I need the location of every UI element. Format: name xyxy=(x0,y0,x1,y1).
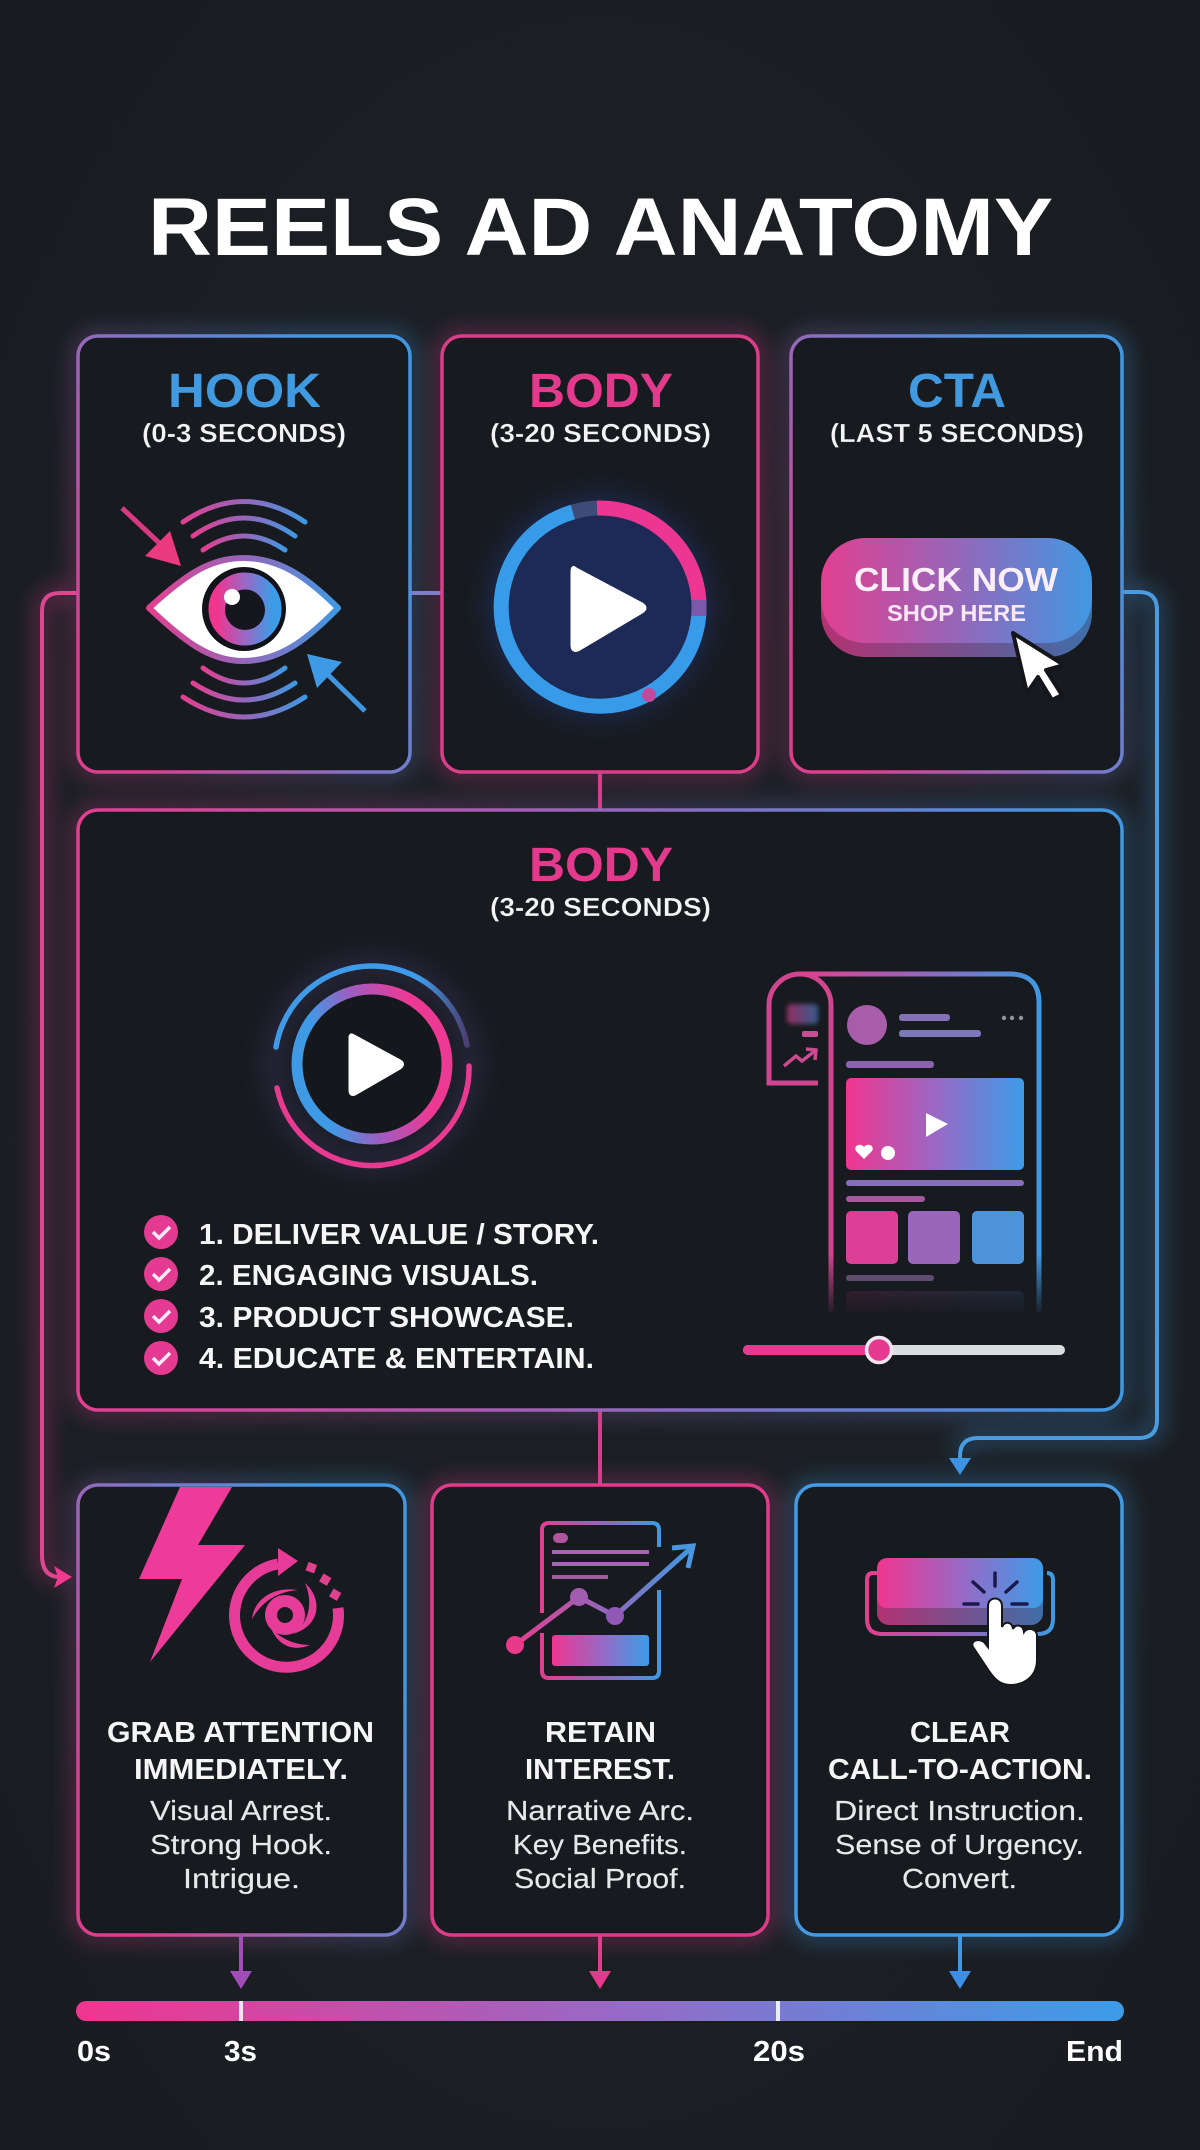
timeline label: 0s: 0s xyxy=(77,2036,111,2068)
arrow: retain interest to timeline xyxy=(589,1935,611,1989)
subheading: hook timing: (0-3 SECONDS) xyxy=(142,418,346,448)
heading: retain interest: RETAIN xyxy=(545,1717,656,1749)
connector: hook to body xyxy=(410,591,442,595)
text: clear call-to-action details: Direct Instruction. xyxy=(834,1795,1085,1826)
icon: lightning bolt xyxy=(139,1487,245,1662)
panel: hook xyxy=(78,336,410,772)
panel: clear call-to-action xyxy=(796,1485,1122,1935)
icon: click now button xyxy=(821,538,1092,700)
panel: body overview xyxy=(442,336,758,772)
icon: cursor xyxy=(1013,633,1064,700)
heading: hook: HOOK xyxy=(168,365,321,418)
timeline label: end: End xyxy=(1066,2036,1123,2068)
list item 4: 4. EDUCATE & ENTERTAIN. xyxy=(199,1343,594,1375)
timeline bar xyxy=(76,2001,1124,2068)
arrow: grab attention to timeline xyxy=(230,1935,252,1989)
text: grab attention details: Intrigue. xyxy=(183,1863,300,1894)
panel: grab attention xyxy=(78,1485,405,1935)
heading: grab attention xyxy=(107,1717,374,1786)
text: grab attention details: Strong Hook. xyxy=(150,1829,332,1860)
panel glow layer xyxy=(42,336,1157,1935)
subheading: cta timing: (LAST 5 SECONDS) xyxy=(830,418,1084,448)
connector: body to detail panel xyxy=(598,772,602,810)
text: retain interest details: Key Benefits. xyxy=(513,1829,687,1860)
icon: play progress ring xyxy=(488,495,712,719)
text: retain interest details: Social Proof. xyxy=(514,1863,686,1894)
icon: swirl xyxy=(235,1548,341,1667)
text: retain interest details: Narrative Arc. xyxy=(506,1795,694,1826)
connector: detail panel to retain panel xyxy=(598,1410,602,1485)
title: REELS AD ANATOMY xyxy=(148,182,1053,273)
icon: eye with arrows xyxy=(122,502,365,717)
text: grab attention details: Visual Arrest. xyxy=(150,1795,332,1826)
text: clear call-to-action details: Sense of Urgency. xyxy=(835,1829,1084,1860)
panel: retain interest xyxy=(432,1485,768,1935)
slider xyxy=(743,1338,1065,1362)
button text: click now: CLICK NOW xyxy=(854,561,1059,598)
heading: grab attention: GRAB ATTENTION xyxy=(107,1717,374,1749)
heading: grab attention: IMMEDIATELY. xyxy=(134,1754,348,1786)
panel: body detail xyxy=(78,810,1122,1410)
text: clear call-to-action details xyxy=(834,1795,1085,1894)
icon: play button with rings xyxy=(274,966,470,1166)
icon: button with tapping hand xyxy=(867,1558,1053,1685)
subheading: body timing: (3-20 SECONDS) xyxy=(490,418,711,448)
timeline label: 3s: 3s xyxy=(224,2036,257,2068)
timeline label: 20s: 20s xyxy=(753,2036,805,2068)
list item 3: 3. PRODUCT SHOWCASE. xyxy=(199,1302,574,1334)
list item 1: 1. DELIVER VALUE / STORY. xyxy=(199,1219,599,1251)
heading: clear call-to-action xyxy=(828,1717,1092,1786)
checklist xyxy=(144,1215,599,1375)
arrow: clear call-to-action to timeline xyxy=(949,1935,971,1989)
heading: body: BODY xyxy=(529,365,673,418)
heading: retain interest xyxy=(525,1717,675,1786)
text: clear call-to-action details: Convert. xyxy=(902,1863,1017,1894)
heading: cta: CTA xyxy=(908,365,1006,418)
icon: scrolling feed phone xyxy=(769,974,1039,1314)
icon: document with growth chart xyxy=(506,1523,693,1678)
button text: shop here: SHOP HERE xyxy=(887,600,1026,626)
text: retain interest details xyxy=(506,1795,694,1894)
heading: retain interest: INTEREST. xyxy=(525,1754,675,1786)
subheading: body detail timing: (3-20 SECONDS) xyxy=(490,892,711,922)
list item 2: 2. ENGAGING VISUALS. xyxy=(199,1260,538,1292)
panel: cta xyxy=(791,336,1122,772)
text: grab attention details xyxy=(150,1795,332,1894)
arrow: cta to clear call-to-action xyxy=(949,592,1157,1475)
heading: clear call-to-action: CALL-TO-ACTION. xyxy=(828,1754,1092,1786)
arrow: hook to grab attention xyxy=(42,593,78,1588)
heading: body detail: BODY xyxy=(529,839,673,892)
heading: clear call-to-action: CLEAR xyxy=(910,1717,1010,1749)
